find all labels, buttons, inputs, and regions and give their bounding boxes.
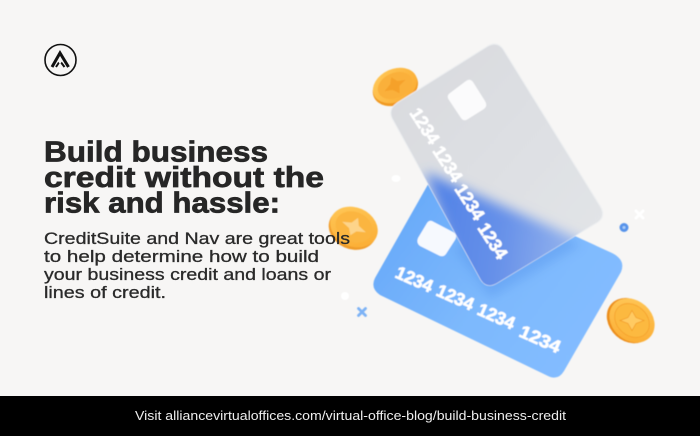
- body text: CreditSuite and Nav are great tools: [44, 229, 350, 248]
- illustration: credit cards and coins: [322, 44, 664, 378]
- body text: your business credit and loans or: [44, 265, 331, 284]
- card number: [392, 262, 564, 357]
- coin: bottom right: [598, 288, 664, 353]
- card chip: [417, 221, 456, 256]
- body text: lines of credit.: [44, 283, 166, 302]
- card number: 1234: [474, 299, 518, 334]
- frosted glass card: [390, 44, 602, 287]
- card number: 1234: [451, 180, 489, 224]
- body text: [44, 229, 350, 302]
- card number: 1234: [429, 142, 467, 186]
- heading: Build business: [44, 136, 268, 168]
- card number: 1234: [433, 280, 477, 315]
- card number: 1234: [406, 104, 444, 148]
- heading: [44, 136, 324, 220]
- card chip: [448, 80, 486, 120]
- blue credit card: [373, 172, 622, 378]
- coin: left: [322, 199, 384, 258]
- card number: 1234: [474, 219, 512, 263]
- heading: credit without the: [44, 162, 324, 194]
- footer link text: Visit alliancevirtualoffices.com/virtual-office-blog/build-business-credit: [135, 409, 567, 423]
- footer bar: [0, 396, 700, 436]
- card number: 1234: [516, 321, 564, 357]
- card number: 1234: [392, 262, 436, 297]
- body text: to help determine how to build: [44, 247, 319, 266]
- decorative sparkles: [341, 175, 643, 316]
- logo: [45, 44, 76, 76]
- heading: risk and hassle:: [44, 188, 280, 220]
- coin: top: [366, 61, 424, 113]
- card number: [406, 104, 512, 263]
